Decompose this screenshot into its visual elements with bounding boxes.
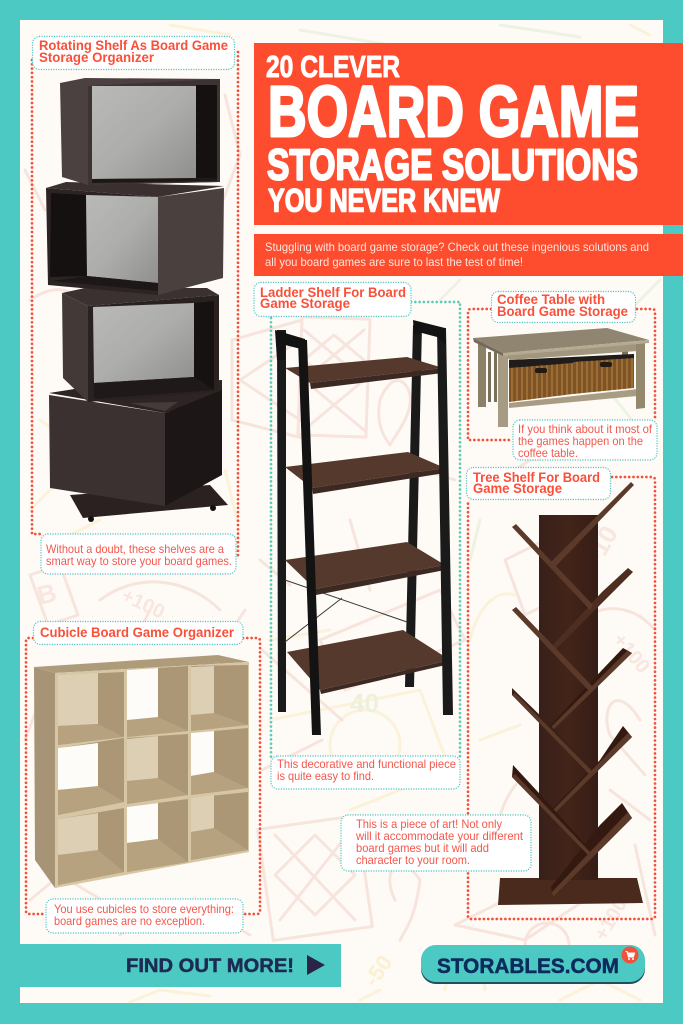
caption: tree shelf: will it accommodate your different: [355, 829, 524, 843]
row 3: [58, 808, 124, 885]
background doodle pattern: +100: [118, 585, 168, 624]
caption: ladder shelf: [271, 756, 460, 789]
label: tree shelf heading: Game Storage: [473, 481, 562, 496]
front legs: [298, 340, 321, 735]
cube 2: [46, 182, 224, 197]
caption: rotating shelf: smart way to store your board games.: [46, 554, 232, 568]
top caps: [275, 330, 307, 360]
icon: shopping cart badge: [622, 946, 638, 964]
label: rotating shelf heading: Storage Organizer: [39, 50, 155, 65]
icon: play arrow: [307, 955, 325, 975]
caption: coffee table: If you think about it most of: [518, 422, 653, 436]
label: coffee table heading: Board Game Storage: [497, 304, 628, 319]
right branches: [551, 482, 634, 567]
row 1: [58, 672, 124, 745]
trunk: [539, 515, 598, 880]
cube 3: [62, 288, 219, 306]
panel: rotating shelf: [32, 36, 238, 574]
base: [70, 485, 228, 518]
panel: tree shelf: [341, 468, 655, 919]
top and apron: [498, 343, 638, 360]
cube 1: [60, 78, 220, 185]
label: cubicle heading: Cubicle Board Game Organizer: [40, 625, 235, 640]
teal find out more band: [20, 944, 341, 987]
title line 4: YOU NEVER KNEW: [268, 182, 500, 218]
image: ladder shelf: [275, 320, 453, 735]
intro text banner: [254, 234, 683, 276]
caption: cubicle shelf: [46, 899, 243, 933]
label: coffee table heading: Coffee Table with: [497, 292, 605, 307]
cube 4: [49, 380, 222, 413]
caption: tree shelf: character to your room.: [356, 853, 470, 867]
caption: cubicle shelf: board games are no exception.: [54, 914, 205, 928]
background doodle pattern: -50: [359, 950, 397, 991]
title banner: [254, 43, 683, 225]
background doodle pattern: B: [34, 577, 60, 611]
back and side legs: [478, 342, 486, 407]
wicker baskets: [509, 363, 573, 402]
label: coffee table heading: [492, 292, 636, 322]
caption: ladder shelf: This decorative and functional piece: [277, 757, 456, 771]
caption: cubicle shelf: You use cubicles to store everything:: [54, 902, 234, 916]
caption: coffee table: the games happen on the: [518, 434, 643, 448]
left side: [34, 667, 55, 888]
background doodle pattern: -10: [579, 520, 624, 568]
row 2: [58, 738, 124, 815]
shelves: [285, 357, 443, 383]
image: cubicle shelf: [34, 655, 249, 888]
storables.com button: [421, 945, 645, 984]
band text: FIND OUT MORE!: [126, 955, 294, 977]
panel: ladder shelf: [254, 282, 460, 789]
intro text banner: Stuggling with board game storage? Check out these ingenious solutions and: [265, 240, 649, 254]
panel: coffee table: [468, 292, 657, 460]
label: ladder shelf heading: [254, 282, 411, 316]
caption: tree shelf: [341, 815, 531, 871]
caption: ladder shelf: is quite easy to find.: [277, 769, 374, 783]
caption: tree shelf: board games but it will add: [356, 841, 489, 855]
caption: rotating shelf: [41, 534, 236, 574]
top: [34, 655, 249, 673]
site name: STORABLES.COM: [437, 955, 619, 978]
image: coffee table: [473, 328, 649, 427]
left branches: [512, 524, 593, 610]
background doodle pattern: 40: [350, 688, 379, 718]
base: [498, 878, 643, 905]
image: rotating shelf unit: [46, 78, 228, 522]
image: tree shelf: [498, 482, 643, 905]
label: tree shelf heading: [466, 468, 610, 500]
title line 1: 20 CLEVER: [266, 49, 400, 84]
label: tree shelf heading: Tree Shelf For Board: [473, 470, 600, 485]
front legs: [498, 353, 508, 427]
label: rotating shelf heading: Rotating Shelf As Board Game: [39, 38, 228, 53]
caption: coffee table: [513, 420, 657, 460]
label: rotating shelf heading: [32, 36, 234, 70]
panel: cubicle organizer: [26, 622, 260, 933]
basket liner: [509, 354, 634, 370]
label: ladder shelf heading: Game Storage: [260, 296, 350, 311]
back legs and wires: [405, 325, 422, 687]
front frame: [55, 662, 249, 888]
caption: coffee table: coffee table.: [518, 446, 578, 460]
intro text banner: all you board games are sure to last the test of time!: [265, 255, 523, 269]
caption: tree shelf: This is a piece of art! Not only: [356, 817, 502, 831]
caption: rotating shelf: Without a doubt, these shelves are a: [46, 542, 224, 556]
lower shelf: [509, 389, 638, 408]
background doodle pattern: +100: [590, 894, 632, 944]
label: cubicle heading: [34, 622, 243, 644]
background doodle pattern: +100: [608, 629, 654, 678]
label: ladder shelf heading: Ladder Shelf For Board: [260, 285, 406, 300]
